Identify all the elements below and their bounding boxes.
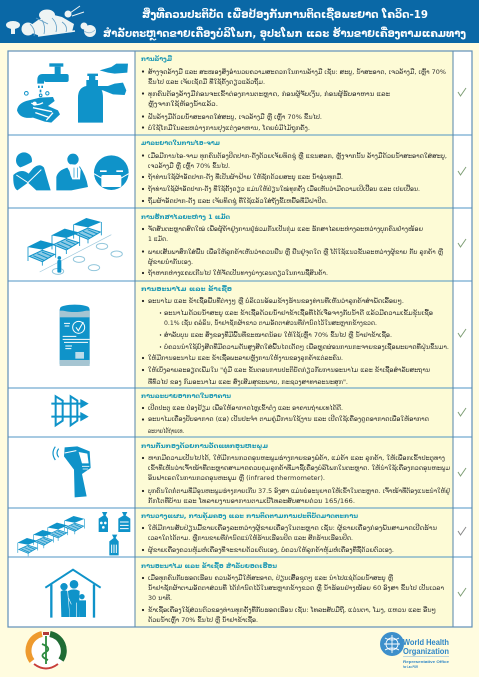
icon: vegetables (6, 6, 96, 37)
panel: hand washing (17, 54, 466, 133)
text block: planning and monitoring: ໃຫ້ມີການສັບປ່ຽນມື້ຂາຍເຄື່ອງລະຫວ່າງຜູ້ຂາຍເຄື່ອງໃນຕະຫຼາດ ເຊັ່ນ: ຜູ້ຂາຍເຄື່ອງກ່ອງພັນສາມາດເປີດຮ້ານ (148, 524, 437, 532)
WHO office line 1: Representative Office (403, 660, 449, 664)
panel: ventilation (51, 392, 466, 435)
logo: Ministry of Health emblem (27, 632, 65, 670)
WHO name: World Health (403, 637, 449, 647)
text block: physical distancing: ຜູ້ຂາຍນຳກັນເອງ. (148, 259, 193, 266)
icon: market stalls and distance markers (27, 218, 122, 274)
check mark (458, 329, 466, 337)
title line 1: ສິ່ງທີ່ຄວນປະຕິບັດ ເພື່ອປ້ອງກັນການຕິດເຊື້ອພະຍາດ ໂຄວິດ-19 (142, 7, 428, 21)
text block: ventilation: ເປີດປະຕູ ແລະ ປ່ອງຢ້ຽມ ເພື່ອໃຫ້ອາກາດໄຫຼເຂົ້າຕໍ່ງ ແລະ ອາຄານຖ່າຍເທໄດ້ດີ. (148, 404, 343, 412)
check mark (458, 527, 466, 535)
text block: temperature screening: ບຸກຄົນໃດກໍ່ຕາມທີ່ມີອຸນຫະພູມຮ່າງກາຍເກີນ 37.5 ອົງສາ ແມ່ນບໍ່ອະນຸຍາດໃຫ້ເຂົ້າໃນຕະຫຼາດ. ເຈົ້າໜ້າທີ່ຕ້ອງແນະນຳໃຫ້ຢູ່ (148, 488, 450, 495)
icon: hand washing (17, 63, 128, 123)
check mark (458, 588, 466, 596)
text block: cough etiquette: ຖ້າທ່ານໃຊ້ຜ້າອັດປາກ-ດັງ ທີ່ໃຊ້ຄັ້ງດຽວ ແມ່ນໃຫ້ປ່ຽນໃໝ່ທຸກຄັ້ງ ເມື່ອເຫັນວ່າມີຄວາມເປິເປື້ອນ ແລະ ເປຍເປື້ອນ. (148, 185, 420, 193)
header banner (0, 0, 479, 43)
text block: cleaning at home (142, 574, 444, 624)
text block: hand washing: ຫຼັງຈາກໃຊ້ຫ້ອງນ້ຳແລ້ວ. (148, 101, 218, 108)
text block: hand washing (142, 69, 446, 133)
text block: temperature screening: ເຂົ້າທີ່ເຫັນວ່າເຈົ້າໜ້າທີ່ຕະຫຼາດສາມາດຄວບຄຸມລູກຄ້າທີ່ມາຊື້ເຄື່ອງບໍລິໂພກໃນຕະຫຼາດ. ໃຫ້ນຳໃຊ້ເຄື່ອງກວດອຸນຫະພູມ (148, 465, 450, 472)
logo: World Health Organization (380, 632, 449, 669)
icon: cough and mask (13, 152, 129, 190)
text block: planning and monitoring: ຜູ້ຂາຍເຄື່ອງຄວນຫຸ້ມຫໍ່ເຄື່ອງທີ່ຈະຂາຍດ້ວຍຕົນເອງ, ບໍ່ຄວນໃຫ້ລູກຄ້າຫຸ້ມຫໍ່ເຄື່ອງທີ່ຊື້ດ້ວຍຕົວເອງ. (148, 547, 394, 554)
text block: physical distancing: ຈັດສັນຕະຫຼາດສົດໃໝ່ ເພື່ອຜູ້ຄ້າຢູ່ງການຢູ່ຮ່ວມກັນເປັນກຸ່ມ ແລະ ຮັກສາໄລຍະຫ່າງລະຫວ່າງບຸກຄົນຢ່າງໜ້ອຍ (148, 225, 423, 233)
text block: temperature screening: ກັກໂຕທີ່ບ້ານ ແລະ ໂທລາຍງານອາການຕາມເບີໂທລະສັບສາຍດ່ວນ 165/166. (148, 498, 355, 505)
panel: planning and monitoring (17, 511, 466, 556)
heading: cleaning at home: ການອະນາໄມ ແລະ ຂ້າເຊື້ອ ສຳລັບຍອດເຮືອນ (141, 561, 278, 570)
text block: cleaning and disinfection (142, 297, 449, 386)
text block: ventilation: ອະນາໄມເຄື່ອງປັບອາກາດ (ແອ) ເປັນປະຈຳ ຕາມຄູ່ມືການໃຊ້ງານ ແລະ ເປີດໃຊ້ເຄື່ອງດູດອາກາດເພື່ອໃຫ້ອາກາດ (148, 415, 429, 423)
text block: ventilation: ລະບາຍໄດ້ຖ່າຍເທ. (148, 427, 184, 435)
icon: airflow through window (51, 396, 87, 425)
text block: cough etiquette: ຖ້າທ່ານໃຊ້ຜ້າອັດປາກ-ດັງ ທີ່ເປັນຜ້າຝ້າຍ ໃຫ້ຊັກດ້ວຍສະບູ ແລະ ນ້ຳອຸ່ນທຸກມື້. (148, 173, 343, 181)
panel: physical distancing (27, 212, 466, 277)
check mark (458, 88, 466, 96)
text block: hand washing: ສ້າງຈຸດລ້າງມື ແລະ ສະໜອງສິ່ງອຳນວຍຄວາມສະດວກໃນການລ້າງມື ເຊັ່ນ: ສະບູ, ນ້ຳສະອາດ, ເຈວລ້າງມື, ເຫຼົ້າ 70% (148, 69, 446, 76)
text block: hand washing: ຂຶ້ນໄປ ແລະ ເຈ້ຍເຊັດມື ທີ່ໃຊ້ຄັ້ງດຽວແລ້ວຖິ້ມ. (148, 78, 265, 86)
icon: stalls and wrapped goods (17, 512, 130, 556)
text block: physical distancing: ຖ້າຫາກຫ່າງແຄບເກີນໄປ ໃຫ້ຈັດເປັນທາງຍ່າງເລນດຽວໃນການຊື້ສິນຄ້າ. (148, 269, 328, 277)
WHO office line 2: for Lao PDR (403, 665, 418, 669)
text block: cleaning at home: ດ້ວຍນ້ຳເຫຼົ້າ 70% ຂຶ້ນໄປ ຫຼື ນ້ຳຢາຂ້າເຊື້ອ. (148, 616, 258, 624)
panel: cough etiquette (13, 139, 466, 206)
text block: cleaning and disinfection: ທີ່ທົ່ວໄປ ຂອງ ກົມອະນາໄມ ແລະ ສົ່ງເສີມສຸຂະພາບ, ກະຊວງສາທາລະນະສຸກ". (148, 378, 348, 386)
heading: planning and monitoring: ການວາງແຜນ, ການຄຸ້ມຄອງ ແລະ ການຕິດຕາມການປະຕິບັດມາດຕະການ (141, 511, 358, 521)
check mark (458, 468, 466, 476)
text block: physical distancing: 1 ແມັດ. (148, 236, 168, 243)
WHO name line 2: Organization (403, 646, 449, 656)
heading: cough etiquette: ມາລະຍາດໃນການໄອ-ຈາມ (141, 139, 220, 147)
text block: ventilation (142, 404, 429, 435)
heading: temperature screening: ການກັ່ນກອງດ້ວຍການວັດແທກອຸນຫະພູມ (141, 441, 268, 451)
text block: planning and monitoring: ເວລາໃດໄດ້ຕາມ. ຫຼືການຂາຍທີ່ກຳນົດແນ່ໃຫ້ຮ້ານເຮືອນປິດ ແລະ ສີກຮ້ານເຮືອນປິດ. (148, 534, 353, 542)
text block: hand washing: ຟັນລ້າງມືດ້ວຍນ້ຳສະອາດໃສ່ສະບູ, ເຈວລ້າງມື ຫຼື ເຫຼົ້າ 70% ຂຶ້ນໄປ. (148, 113, 322, 121)
text block: cough etiquette: ເມື່ອມີການໄອ-ຈາມ ທຸກຄົນຕ້ອງປິດປາກ-ດັງດ້ວຍເຈ້ຍທິດຊູ່ ຫຼື ແຂນສອກ, ຫຼັງຈາກນັ້ນ ລ້າງມືດ້ວຍນ້ຳສະອາດໃສ່ສະບູ, (148, 152, 447, 161)
text block: cough etiquette (142, 152, 447, 206)
text block: temperature screening: ຫາກມີຄວາມເປັນໄປໄດ້, ໃຫ້ມີການກວດອຸນຫະພູມຮ່າງກາຍຂອງພໍ່ຄ້າ, ແມ່ຄ້າ ແລະ ລູກຄ້າ, ໃຫ້ເພື່ອກເຂົ້າປະຕູທາງ (148, 454, 445, 462)
text block: cleaning at home: ຂ້າເຊື້ອເຄື່ອງໃຊ້ສ່ວນຕົວຂອງທ່ານທຸກຄັ້ງທີ່ກັບຮອດເຮືອນ ເຊັ່ນ: ໂທລະສັບມືຖື, ແວ່ນຕາ, ໂມງ, ແຫວນ ແລະ ອື່ນໆ (148, 607, 436, 614)
text block: cleaning and disinfection: ບໍ່ຄວນນຳໃຊ້ຍົງສີດທີ່ມີຄວາມດັນສູງສີດໃສ່ພື້ນໄດເດັດໆ ເພື່ອຫຼຸດຜ່ອນການກະຈາຍຂອງເຊື້ອພະຍາດທີ່ຝຸ່ນຂຶ້ນມາ. (164, 343, 449, 351)
panel: cleaning at home (45, 561, 466, 624)
heading: physical distancing: ການຮັກສາໄລຍະຫ່າງ 1 ແມັດ (141, 212, 230, 221)
text block: cough etiquette: ຖິ້ມຜ້າອັດປາກ-ດັງ ແລະ ເຈ້ຍທິດຊູ່ ທີ່ໃຊ້ແລ້ວໃສ່ຖັງຂີ້ເຫຍື້ອທີ່ມີຝາປິດ. (148, 197, 328, 206)
icon: disinfectant jar (60, 305, 90, 366)
text block: temperature screening: ອິນຟາເຣດໃນການກວດອຸນຫະພູມ ຫຼື (infrared thermometer). (148, 475, 325, 482)
text block: cleaning at home: 30 ນາທີ. (148, 595, 172, 602)
panel: cleaning and disinfection (60, 284, 466, 386)
text block: hand washing: ບໍ່ໃຊ້ໂກມືໃນລະຫວ່າງການປຸງແຕ່ງອາຫານ, ໂດຍບໍ່ມີໄມ້ຖູກຄັ່ງ. (148, 124, 310, 133)
text block: temperature screening (142, 454, 450, 505)
text block: physical distancing (142, 225, 444, 277)
heading: hand washing: ການລ້າງມື (141, 54, 173, 63)
text block: hand washing: ທຸກຄົນຕ້ອງລ້າງມືກ່ອນຈະເຂົ້າຕ່ອງການຕະຫຼາດ, ກ່ອນຜູ້ຈັບເງິນ, ກ່ອນຜູ້ຮັບອາຫານ ແລະ (148, 91, 390, 98)
text block: cleaning at home: ເມື່ອທຸກຄົນກັບຮອດເຮືອນ ຄວນລ້າງມືໃຫ້ສະອາດ, ປ່ຽນເສື້ອຊຸດໆ ແລະ ນຳໄປແຊ່ດ້ວຍນ້ຳສະບູ ຫຼື (148, 574, 394, 583)
text block: cleaning and disinfection: ໃຫ້ມີການອະນາໄມ ແລະ ຂ້າເຊື້ອພະລາຍຫຼັງການໃຫ້ງານຂອງລູກຄ້າແຕ່ລະຄົນ. (148, 354, 343, 362)
icon: family in house (45, 570, 101, 618)
text block: planning and monitoring (142, 524, 437, 554)
text block: cleaning and disinfection: ໃຫ້ເບິ່ງລາຍລະອຽດເພີ່ມໃນ "ຄູ່ມື ແລະ ຂັ້ນຕອນການປະຕິບັດກ່ຽວກັບການອະນາໄມ ແລະ ຂ້າເຊື້ອສຳລັບສະຖານ (148, 366, 430, 374)
WHO divider (403, 656, 449, 658)
icon: WHO globe (380, 632, 404, 656)
text block: cleaning and disinfection: ສຳລັບບຸນ ແລະ ສິ່ງຂອງທີ່ມີພື້ນທີ່ຂະໜາດນ້ອຍ ໃຫ້ໃຊ້ເຫຼົ້າ 70% ຂຶ້ນໄປ ຫຼື ນ້ຳຢາຂ້າເຊື້ອ. (164, 331, 392, 339)
text block: cleaning and disinfection: ອະນາໄມ ແລະ ຂ້າເຊື້ອພື້ນທີ່ຕ່າງໆ ຫຼື ບໍລິເວນອ້ອມຂ້າງຮ້ານຂອງທ່ານທີ່ເຫັນວ່າລູກຄ້າສຳພັດເລື້ອຍໆ. (148, 297, 404, 305)
text block: cough etiquette: ເຈວລ້າງມື ຫຼື ເຫຼົ້າ 70% ຂຶ້ນໄປ. (148, 162, 230, 170)
panel: temperature screening (53, 441, 466, 505)
icon: infrared thermometer (53, 446, 91, 497)
heading: cleaning and disinfection: ການອະນາໄມ ແລະ ຂ້າເຊື້ອ (141, 284, 233, 293)
heading: ventilation: ການລະບາຍອາກາດໃນອາຄານ (141, 392, 231, 400)
text block: cleaning and disinfection: ອະນາໄມດ້ວຍນ້ຳສະບູ ແລະ ຂ້າເຊື້ອດ້ວຍນ້ຳຢາຂ້າເຊື້ອທີ່ໄດ້ເຈືອຈາງກັບນ້ຳດີ ແລ້ວມີຄວາມເຂັ້ມຂຸ້ນເຊື້ອ (164, 309, 433, 317)
check mark (458, 408, 466, 416)
check mark (458, 167, 466, 175)
text block: physical distancing: ພາຍເສັ້ນພາສຶກໃສ່ພື້ນ ເພື່ອໃຫ້ລູກຄ້າເຫັນວ່າຄວນຢືນ ຫຼື ຢືນຢູ່ຈຸດໃດ ຫຼື ໂຕ້ໃຊ້ແນວຂັ້ນລະຫວ່າງຜູ້ຂາຍ ກັບ ລູກຄ້າ ຫຼື (148, 249, 444, 256)
check mark (458, 239, 466, 247)
text block: cleaning at home: ນ້ຳຢາຊັກຜ້າຕາມອັດຕາສ່ວນທີ່ ໄດ້ກຳນົດໄວ້ໃນສະຫຼາກຂ້າງຂວດ ຫຼື ນ້ຳຮ້ອນຢ່າງໜ້ອຍ 60 ອົງສາ ຂຶ້ນໄປ ເປັນເວລາ (148, 584, 444, 592)
text block: cleaning and disinfection: 0.1% ເຊັ່ນ ຄລໍຣິນ, ນ້ຳຢາຊັກຜ້າຂາວ ຕາມອັດຕາສ່ວນທີ່ກຳນົດໄວ້ໃນສະຫຼາກຂ້າງຂວດ. (164, 319, 377, 327)
